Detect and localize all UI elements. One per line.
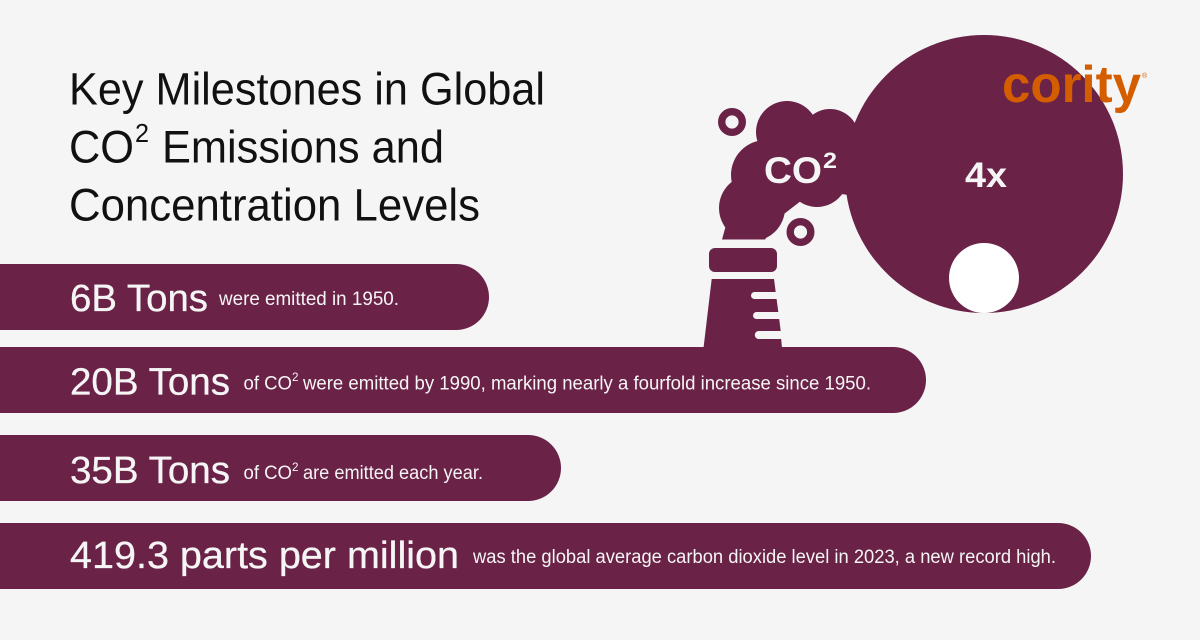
- logo: cority: cority: [1002, 56, 1141, 114]
- bar: 20B Tons: of CO: [244, 374, 292, 394]
- bar: 20B Tons: 2: [292, 370, 299, 384]
- chimney stack: [704, 279, 782, 348]
- CO2 label: 2: [823, 148, 837, 173]
- bar: 35B Tons: 35B Tons: [70, 450, 230, 492]
- bar: 6B Tons: [0, 264, 489, 330]
- CO2 label: CO: [764, 150, 822, 191]
- illustration: factory chimney with CO2 smoke: [704, 101, 860, 348]
- title: Emissions and: [162, 122, 444, 172]
- bar: 35B Tons: of CO: [244, 463, 292, 484]
- bar: 35B Tons: 2: [292, 460, 299, 474]
- 4x label: 4x: [965, 156, 1008, 195]
- bar: 35B Tons: are emitted each year.: [303, 463, 483, 484]
- bar: 20B Tons: were emitted by 1990, marking nearly a fourfold increase since 1950.: [302, 374, 871, 394]
- smoke cloud: [719, 101, 860, 241]
- bar: 419.3 parts per million: [0, 523, 1091, 589]
- title: Key Milestones in Global: [69, 64, 545, 114]
- bar: 6B Tons: 6B Tons: [70, 278, 208, 320]
- title: [69, 64, 545, 230]
- smoke ring: upper: [722, 112, 742, 132]
- bar: 20B Tons: [0, 347, 926, 413]
- title: Concentration Levels: [69, 180, 480, 230]
- bar: 35B Tons: [0, 435, 561, 501]
- bar: 419.3 parts per million: was the global average carbon dioxide level in 2023, a new record high.: [472, 547, 1056, 568]
- smoke ring: lower: [790, 222, 811, 242]
- bar: 419.3 parts per million: 419.3 parts per million: [70, 535, 459, 577]
- chimney cap: [709, 248, 777, 272]
- comparison circle: 4x: [845, 35, 1123, 313]
- title: 2: [135, 118, 149, 148]
- title: CO: [69, 122, 134, 172]
- small white circle: [949, 243, 1019, 313]
- bar: 6B Tons: were emitted in 1950.: [218, 289, 399, 310]
- bar: 20B Tons: 20B Tons: [70, 362, 230, 404]
- logo: cority: ®: [1142, 72, 1148, 80]
